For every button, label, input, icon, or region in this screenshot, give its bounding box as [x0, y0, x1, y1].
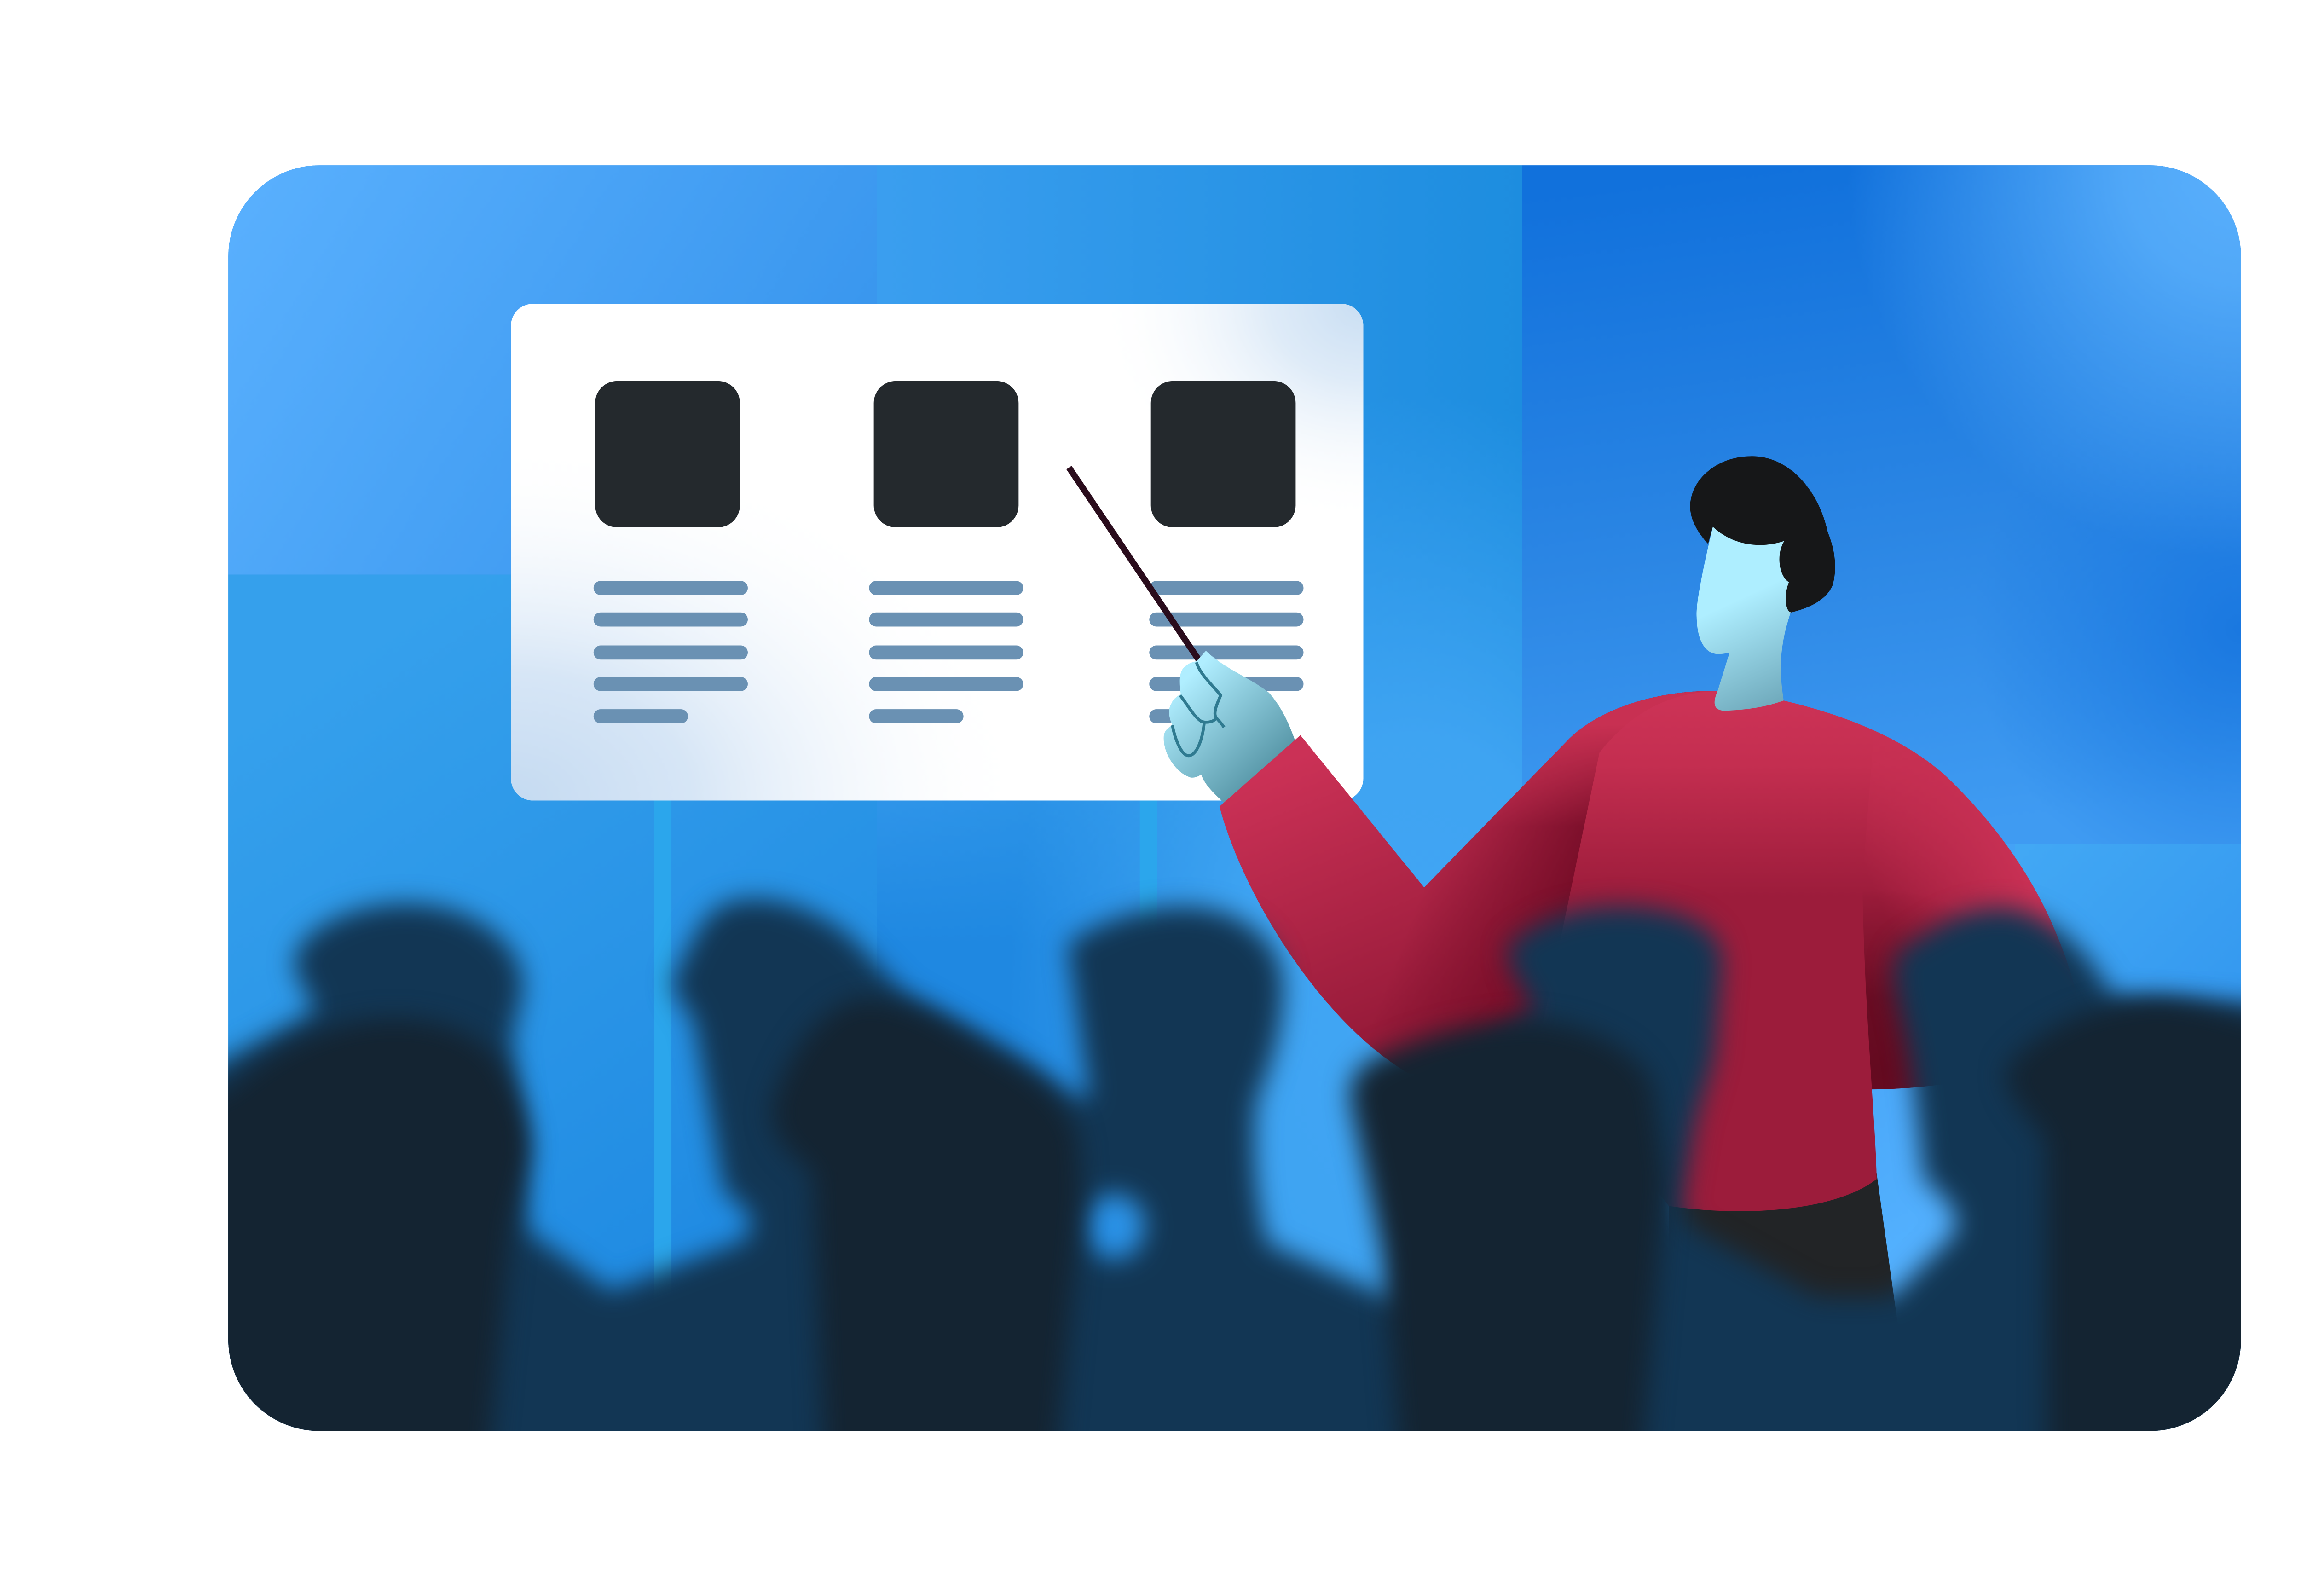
sweater: far arm	[1784, 700, 2081, 1089]
column 3: icon square and text lines	[1149, 381, 1304, 723]
audience: front row person 3	[1350, 1020, 1665, 1511]
head and neck	[1696, 527, 1795, 711]
finger lines	[1173, 662, 1224, 756]
presenter figure	[1066, 456, 2068, 1318]
audience: front row person 2	[771, 998, 1081, 1511]
column 1: icon square and text lines	[594, 381, 748, 723]
hand	[1164, 651, 1301, 819]
column 2: icon square and text lines	[869, 381, 1023, 723]
board stand legs	[654, 787, 1157, 1307]
audience: front row person 1	[142, 1018, 530, 1511]
pointer stick	[1069, 468, 1200, 661]
panel: rounded blue background	[228, 165, 2242, 1431]
audience silhouettes	[142, 899, 2301, 1511]
audience: back row	[142, 899, 2301, 1511]
sweater: raised arm	[1220, 691, 1784, 1110]
panel: presentation board	[511, 304, 1364, 800]
hair	[1690, 456, 1835, 613]
sweater: torso	[1540, 691, 1877, 1211]
audience: front row person 4	[2006, 1000, 2301, 1511]
trousers	[1669, 1173, 1896, 1318]
